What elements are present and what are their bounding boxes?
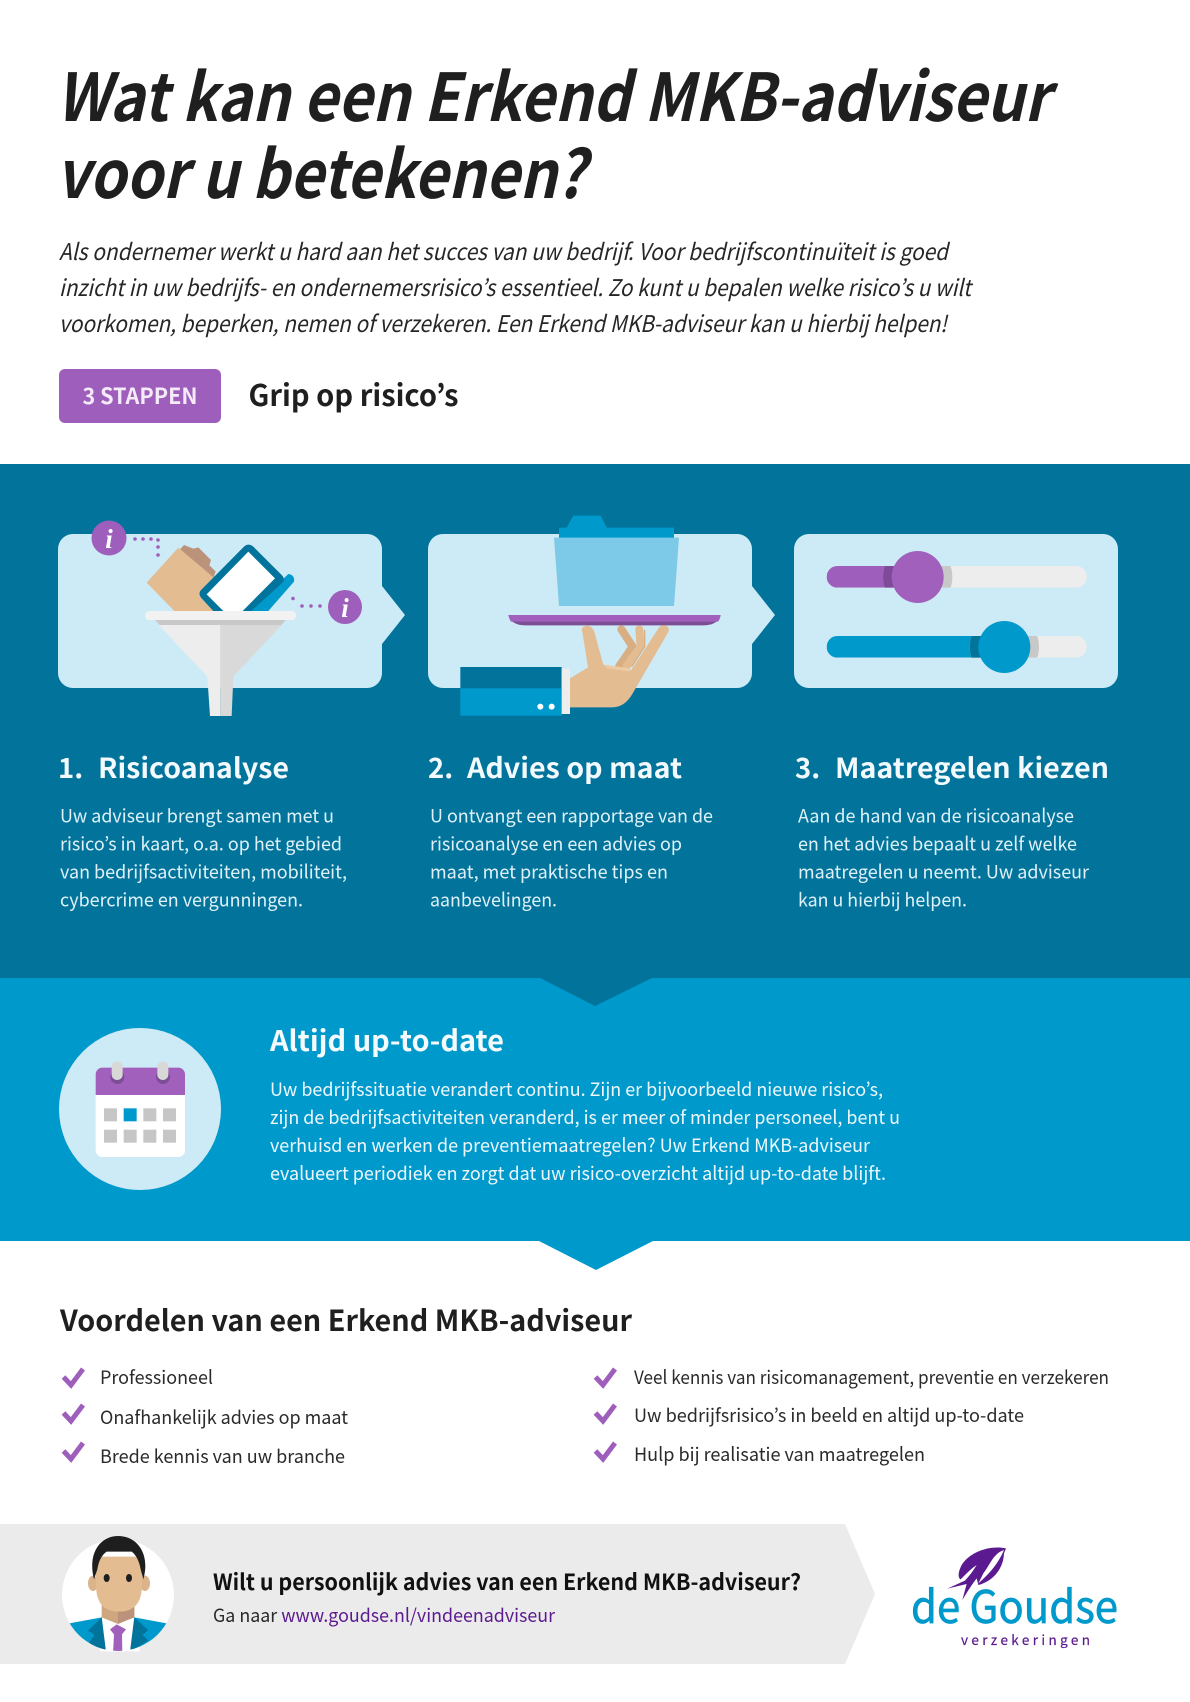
panel: contact banner	[0, 1524, 875, 1664]
title	[56, 45, 1059, 218]
step 2 heading: 2.	[428, 746, 453, 786]
intro text: Als ondernemer werkt u hard aan het succes van uw bedrijf. Voor bedrijfscontinuïteit is goed	[59, 233, 950, 267]
step 3 text	[798, 802, 1090, 912]
badge: 3 stappen	[59, 369, 221, 423]
panel: step 3 illustration	[794, 534, 1118, 688]
step 2 heading: Advies op maat	[466, 746, 682, 786]
step 3 text: maatregelen u neemt. Uw adviseur	[798, 858, 1090, 884]
step 3 heading: Maatregelen kiezen	[835, 746, 1109, 786]
icon: info badge right	[328, 590, 362, 624]
text: altijd up-to-date: Uw bedrijfssituatie verandert continu. Zijn er bijvoorbeeld nieuwe risico’s,	[270, 1076, 883, 1102]
step 2 text: U ontvangt een rapportage van de	[430, 802, 713, 828]
list: benefits left	[64, 1364, 348, 1469]
badge: 3 stappen: 3 STAPPEN	[82, 379, 198, 411]
heading: altijd up-to-date: Altijd up-to-date	[269, 1019, 504, 1060]
icon: info badge left	[92, 520, 126, 556]
step 1 text: van bedrijfsactiviteiten, mobiliteit,	[60, 858, 347, 884]
panel: altijd up-to-date	[0, 978, 1190, 1241]
title: voor u betekenen?	[56, 122, 594, 218]
step 3 heading: 3.	[795, 746, 820, 786]
call to action link: Ga naar www.goudse.nl/vindeenadviseur	[213, 1602, 556, 1628]
logo: de Goudse	[911, 1547, 1118, 1649]
text: altijd up-to-date: zijn de bedrijfsactiviteiten veranderd, is er meer of minder personeel, bent u	[270, 1104, 900, 1130]
step 3 text: Aan de hand van de risicoanalyse	[798, 802, 1074, 828]
intro text: voorkomen, beperken, nemen of verzekeren. Een Erkend MKB-adviseur kan u hierbij helpen!	[59, 305, 949, 339]
icon: folder on tray held by hand	[460, 516, 721, 716]
logo: de Goudse: de Goudse	[911, 1571, 1118, 1636]
subheading: grip op risico's: Grip op risico’s	[248, 373, 458, 415]
intro text: inzicht in uw bedrijfs- en ondernemersrisico’s essentieel. Zo kunt u bepalen welke risico’s u wilt	[59, 269, 974, 303]
icon: sliders	[826, 551, 1087, 673]
list: benefits left: Professioneel	[100, 1364, 213, 1390]
step 2 text: risicoanalyse en een advies op	[430, 830, 682, 856]
arrow: steps into up-to-date	[540, 978, 652, 1006]
step 1 text: risico’s in kaart, o.a. op het gebied	[60, 830, 342, 856]
step 1 text: Uw adviseur brengt samen met u	[60, 802, 334, 828]
icon: info badge right: i	[341, 593, 349, 623]
step 2 text	[430, 802, 713, 912]
title: Wat kan een Erkend MKB-adviseur	[56, 45, 1059, 141]
icon: info badge left: i	[105, 524, 113, 554]
icon: funnel with documents	[145, 545, 296, 716]
text: altijd up-to-date: evalueert periodiek en zorgt dat uw risico-overzicht altijd up-to-date blijft.	[270, 1160, 886, 1186]
step 2 text: aanbevelingen.	[430, 886, 557, 912]
text: altijd up-to-date: verhuisd en werken de preventiemaatregelen? Uw Erkend MKB-adviseur	[270, 1132, 871, 1158]
arrow: up-to-date into benefits	[539, 1241, 653, 1270]
step 1 heading: 1.	[58, 746, 83, 786]
list: benefits right: Veel kennis van risicomanagement, preventie en verzekeren	[634, 1364, 1109, 1390]
call to action heading: Wilt u persoonlijk advies van een Erkend MKB-adviseur?	[213, 1565, 801, 1597]
step 3 text: en het advies bepaalt u zelf welke	[798, 830, 1077, 856]
list: benefits right	[596, 1364, 1109, 1467]
list: benefits left: Onafhankelijk advies op maat	[100, 1404, 348, 1430]
text: altijd up-to-date	[270, 1076, 900, 1186]
list: benefits left: Brede kennis van uw branche	[100, 1443, 345, 1469]
logo: de Goudse: verzekeringen	[961, 1629, 1090, 1649]
step 1 text: cybercrime en vergunningen.	[60, 886, 303, 912]
step 1 heading: Risicoanalyse	[98, 746, 289, 786]
list: benefits right: Hulp bij realisatie van maatregelen	[634, 1441, 925, 1467]
dotted connectors	[133, 537, 322, 608]
list: benefits right: Uw bedrijfsrisico’s in beeld en altijd up-to-date	[634, 1402, 1024, 1428]
step 2 text: maat, met praktische tips en	[430, 858, 668, 884]
heading: voordelen: Voordelen van een Erkend MKB-adviseur	[59, 1298, 632, 1340]
icon: adviser portrait	[62, 1536, 174, 1653]
panel: steps background	[0, 464, 1190, 978]
panel: step 1 illustration	[58, 520, 405, 716]
intro text	[59, 233, 974, 339]
icon: calendar	[59, 1028, 221, 1190]
panel: step 2 illustration	[428, 516, 775, 716]
step 3 text: kan u hierbij helpen.	[798, 886, 967, 912]
step 1 text	[60, 802, 347, 912]
